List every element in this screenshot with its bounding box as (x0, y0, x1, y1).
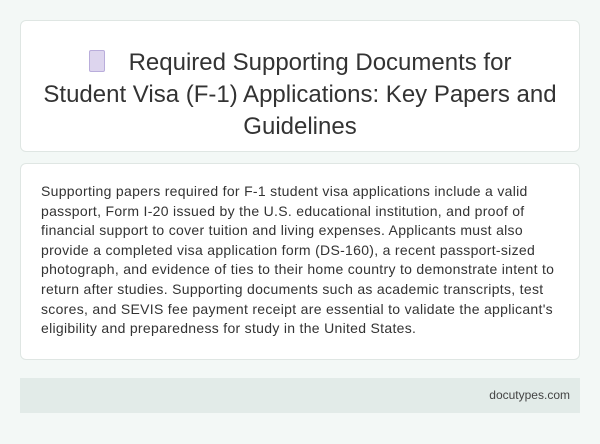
text block (41, 183, 554, 336)
title (43, 49, 557, 140)
text block: financial support to cover tuition and living expenses. Applicants must also (41, 222, 523, 238)
panel: title (20, 20, 580, 152)
text block: Supporting papers required for F-1 student visa applications include a valid (41, 183, 528, 199)
text block: scores, and SEVIS fee payment receipt are essential to validate the applicant's (41, 301, 553, 317)
text block: passport, Form I-20 issued by the U.S. educational institution, and proof of (41, 203, 524, 219)
title: Student Visa (F-1) Applications: Key Papers and (43, 81, 557, 108)
footer (20, 378, 580, 413)
text block: provide a completed visa application form (DS-160), a recent passport-sized (41, 242, 535, 258)
text block: eligibility and preparedness for study in the United States. (41, 320, 416, 336)
footer text: docutypes.com (489, 388, 570, 402)
text block: photograph, and evidence of ties to their home country to demonstrate intent to (41, 261, 554, 277)
title: Required Supporting Documents for (129, 49, 511, 76)
text block: return after studies. Supporting documents such as academic transcripts, test (41, 281, 543, 297)
panel: description (20, 163, 580, 360)
title: Guidelines (243, 113, 357, 140)
icon: document (89, 50, 105, 72)
